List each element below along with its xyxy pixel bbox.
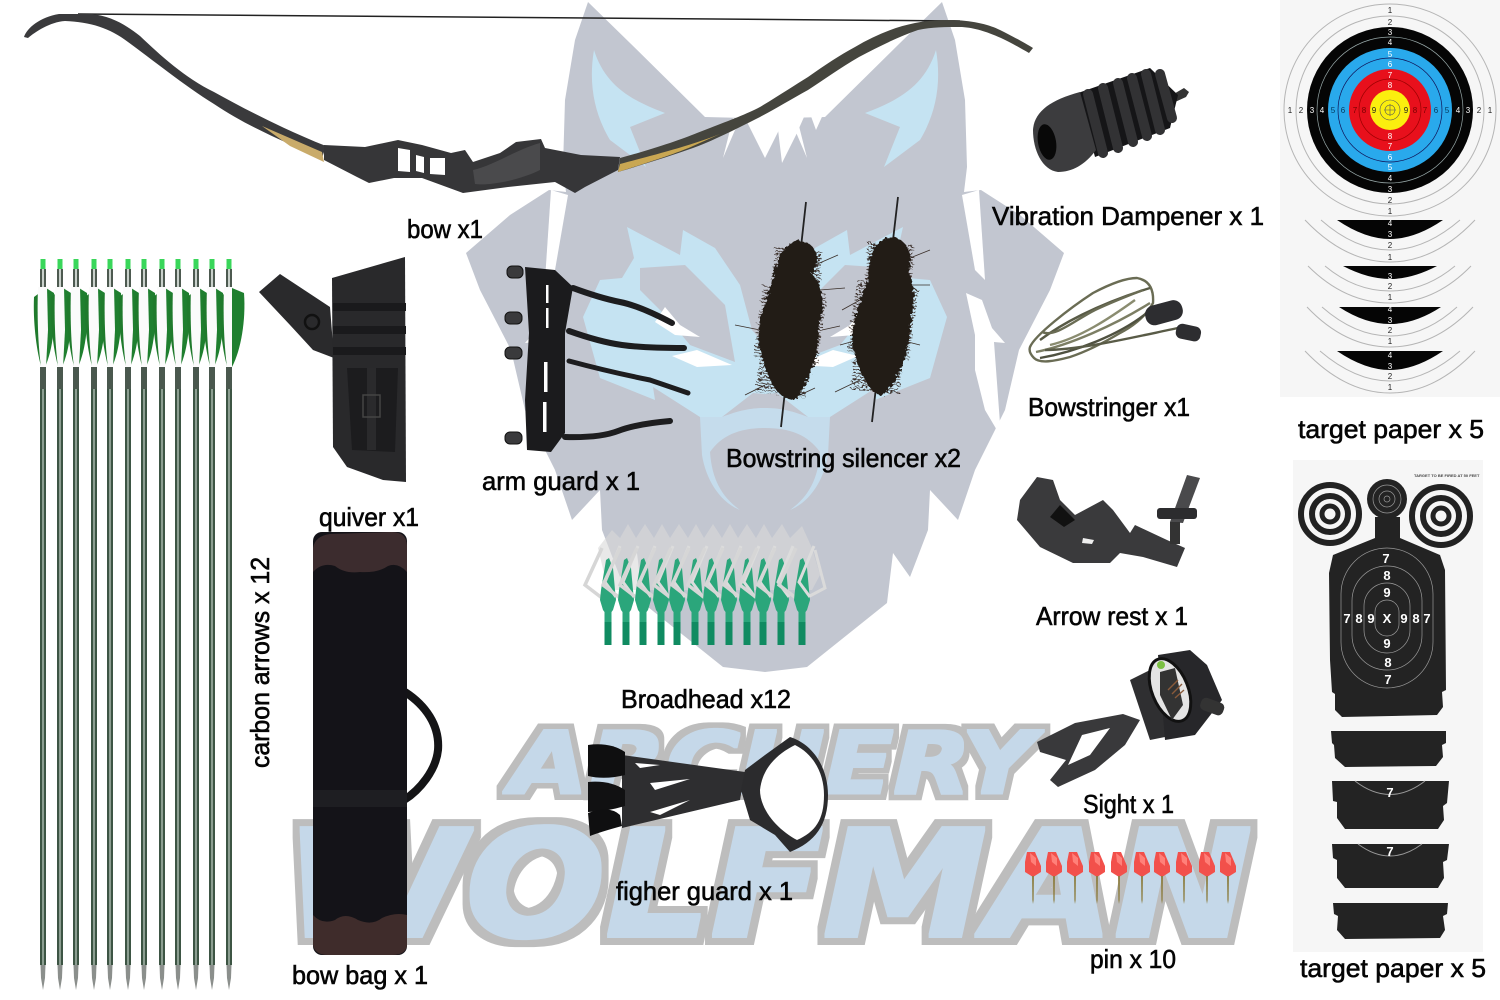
quiver <box>259 257 406 482</box>
label: arm guard: arm guard x 1 <box>482 466 640 496</box>
target paper sheet: round target: 5 <box>1331 106 1336 115</box>
target strip 1: 4 <box>1388 219 1393 228</box>
finger guard <box>588 737 828 852</box>
silhouette fragment 3: 7 <box>1386 844 1394 859</box>
target paper sheet: round target: 1 <box>1488 106 1493 115</box>
silhouette body: 8 <box>1384 655 1392 670</box>
label: target paper bottom: target paper x 5 <box>1300 953 1486 983</box>
target paper sheet: round target: 9 <box>1404 106 1409 115</box>
bowstring silencers <box>735 197 930 427</box>
silhouette fragment 1 <box>1331 731 1446 767</box>
target paper sheet: round target: 5 <box>1388 50 1393 59</box>
target paper sheet: round target: 4 <box>1388 38 1393 47</box>
silhouette body: 7 <box>1423 611 1431 626</box>
target strip 1: 1 <box>1388 253 1393 262</box>
label: sight: Sight x 1 <box>1083 789 1174 819</box>
target paper sheet: round target: 7 <box>1388 142 1393 151</box>
target strip 4: 3 <box>1388 362 1393 371</box>
target paper sheet: round target: 4 <box>1388 174 1393 183</box>
target paper sheet: round target: 3 <box>1310 106 1315 115</box>
target paper sheet: round target: 7 <box>1353 106 1358 115</box>
arrows <box>34 259 244 990</box>
bullseye right <box>1412 487 1470 545</box>
target paper sheet: round target: 7 <box>1388 71 1393 80</box>
bow <box>24 14 1033 193</box>
target strip 3: 1 <box>1388 337 1393 346</box>
target strip 2: 1 <box>1388 293 1393 302</box>
target paper sheet: round target: 8 <box>1388 132 1393 141</box>
silhouette body: 7 <box>1384 672 1392 687</box>
silhouette body <box>1329 479 1446 717</box>
target paper sheet: silhouette target <box>1293 460 1483 952</box>
silhouette body: 7 <box>1382 551 1390 566</box>
background: ARCHERY WOLFMAN wordmark: ARCHERY <box>503 714 1044 814</box>
target paper sheet: round target: 4 <box>1456 106 1461 115</box>
silhouette body: 8 <box>1383 568 1391 583</box>
target paper sheet: round target: 4 <box>1320 106 1325 115</box>
label: vibration dampener: Vibration Dampener x 1 <box>992 201 1264 231</box>
label: arrow rest: Arrow rest x 1 <box>1036 601 1188 631</box>
target strip 4 <box>1305 351 1475 393</box>
target paper sheet: round target: 3 <box>1388 28 1393 37</box>
target paper sheet: round target: 1 <box>1388 207 1393 216</box>
silhouette body: 8 <box>1355 611 1363 626</box>
target paper sheet: round target: 8 <box>1362 106 1367 115</box>
label: pin: pin x 10 <box>1090 944 1176 974</box>
silhouette body: X <box>1383 611 1392 626</box>
target paper sheet: round target: 3 <box>1466 106 1471 115</box>
target paper sheet: round target: 5 <box>1445 106 1450 115</box>
target paper sheet: round target: 6 <box>1341 106 1346 115</box>
target paper sheet: round target: 1 <box>1288 106 1293 115</box>
label: carbon arrows: carbon arrows x 12 <box>245 557 275 768</box>
pins <box>1025 852 1236 904</box>
target strip 4: 2 <box>1388 372 1393 381</box>
silhouette body: 8 <box>1412 611 1420 626</box>
target paper sheet: round target <box>1280 0 1500 397</box>
target strip 1: 2 <box>1388 241 1393 250</box>
target paper sheet: round target: 2 <box>1388 196 1393 205</box>
target paper sheet: round target: 6 <box>1434 106 1439 115</box>
label: bow: bow x1 <box>407 214 483 244</box>
target strip 1 <box>1305 219 1475 262</box>
bow bag <box>313 532 438 955</box>
silhouette fragment 4 <box>1333 903 1448 939</box>
target strip 4: 1 <box>1388 383 1393 392</box>
target paper sheet: round target: 6 <box>1388 153 1393 162</box>
arm guard <box>505 266 688 452</box>
target paper sheet: round target: 3 <box>1388 185 1393 194</box>
silhouette body: 9 <box>1383 585 1391 600</box>
target strip 2: 2 <box>1388 282 1393 291</box>
target strip 2 <box>1308 266 1471 303</box>
target strip 3: 2 <box>1388 326 1393 335</box>
label: broadhead: Broadhead x12 <box>621 684 791 714</box>
target strip 3 <box>1307 305 1473 347</box>
label: bow bag: bow bag x 1 <box>292 960 428 990</box>
label: bowstringer: Bowstringer x1 <box>1028 392 1190 422</box>
bowstringer <box>1030 278 1202 361</box>
label: bowstring silencer: Bowstring silencer x2 <box>726 443 961 473</box>
target paper sheet: round target: 2 <box>1477 106 1482 115</box>
silhouette body: 9 <box>1383 636 1391 651</box>
arrow rest <box>1017 475 1200 567</box>
target paper sheet: silhouette target: TARGET TO BE FIRED AT 50 FEET <box>1414 473 1480 478</box>
target strip 3: 3 <box>1388 316 1393 325</box>
sight <box>1037 650 1226 787</box>
background: wolf head logo <box>466 2 1064 672</box>
label: quiver: quiver x1 <box>319 502 419 532</box>
silhouette fragment 2 <box>1332 781 1449 829</box>
target paper sheet: round target: 7 <box>1423 106 1428 115</box>
target paper sheet: round target: 2 <box>1388 18 1393 27</box>
silhouette body: 9 <box>1367 611 1375 626</box>
target strip 4: 4 <box>1388 351 1393 360</box>
target paper sheet: round target: 8 <box>1388 81 1393 90</box>
target strip 1: 3 <box>1388 230 1393 239</box>
target paper sheet: round target: 5 <box>1388 163 1393 172</box>
silhouette body: 7 <box>1343 611 1351 626</box>
target paper sheet: round target: 6 <box>1388 60 1393 69</box>
background: ARCHERY WOLFMAN wordmark: WOLFMAN <box>284 799 1252 971</box>
bullseye left <box>1301 485 1359 543</box>
silhouette fragment 3 <box>1332 844 1449 888</box>
silhouette body: 9 <box>1400 611 1408 626</box>
target paper sheet: round target: 1 <box>1388 6 1393 15</box>
target strip 3: 4 <box>1388 305 1393 314</box>
background: ARCHERY WOLFMAN wordmark <box>284 714 1252 971</box>
silhouette fragment 2: 7 <box>1386 785 1394 800</box>
vibration dampener <box>1033 68 1189 172</box>
target paper sheet: round target: 2 <box>1299 106 1304 115</box>
broadheads <box>585 524 825 645</box>
target paper sheet: round target: 9 <box>1372 106 1377 115</box>
label: finger guard: figher guard x 1 <box>616 876 793 906</box>
target paper sheet: round target: 8 <box>1413 106 1418 115</box>
target strip 2: 3 <box>1388 272 1393 281</box>
label: target paper top: target paper x 5 <box>1298 414 1484 444</box>
